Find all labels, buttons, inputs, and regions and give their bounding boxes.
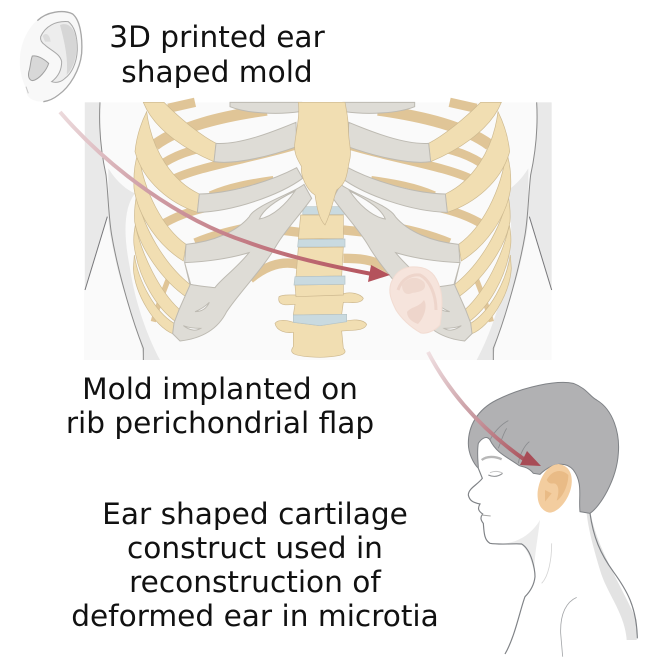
text: ear shaped cartilage construct: construct used in	[127, 531, 383, 565]
sternum	[295, 102, 350, 225]
text: mold implanted: rib perichondrial flap	[66, 406, 374, 440]
heading: 3D printed ear shaped mold: 3D printed ear	[109, 20, 326, 54]
face and neck outline	[468, 468, 535, 654]
back ribs lower	[250, 230, 390, 279]
text: ear shaped cartilage construct: Ear shaped cartilage	[102, 497, 408, 531]
spine	[275, 207, 367, 357]
icon: 3D printed ear mold	[20, 11, 82, 102]
hair fringe strands	[490, 421, 529, 463]
panel: rib cage illustration	[84, 102, 552, 360]
text: ear shaped cartilage construct	[71, 497, 439, 633]
text: mold implanted: Mold implanted on	[82, 372, 358, 406]
text: ear shaped cartilage construct: deformed ear in microtia	[71, 599, 439, 633]
icon: ear mold implanted on ribs	[390, 267, 442, 333]
hair	[468, 382, 619, 513]
text: mold implanted	[66, 372, 374, 440]
eye and brow	[482, 457, 503, 516]
ear, orange highlight	[538, 464, 572, 513]
text: ear shaped cartilage construct: reconstruction of	[129, 565, 381, 599]
neck shadow	[587, 513, 637, 640]
illustration: head in profile	[468, 382, 637, 657]
heading: 3D printed ear shaped mold	[109, 20, 326, 89]
heading: 3D printed ear shaped mold: shaped mold	[121, 55, 313, 89]
arrow: from mold to rib flap	[60, 112, 390, 282]
body outline and arms	[85, 102, 552, 360]
arrow: from rib flap to ear	[428, 352, 541, 466]
ribs and costal cartilage	[133, 102, 511, 341]
